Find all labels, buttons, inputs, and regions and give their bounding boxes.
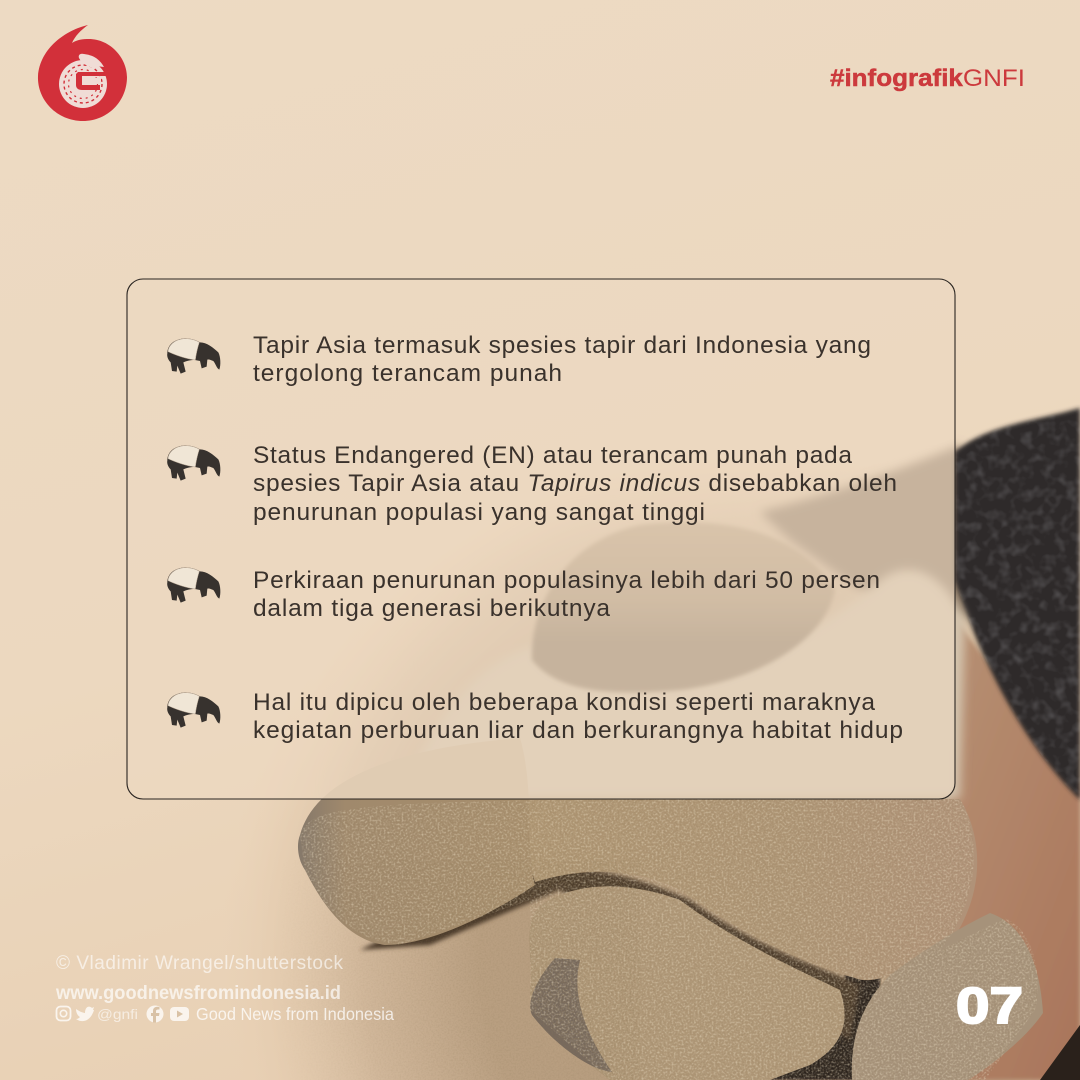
photo: sand grain [290,799,1080,1080]
icon: twitter [76,1007,94,1021]
website: www.goodnewsfromindonesia.id [55,982,341,1004]
photo: ground grain [388,862,640,1077]
icon: tapir 1 [167,338,220,374]
panel: facts [127,279,955,799]
text: fact 2: penurunan populasi yang sangat tinggi [253,499,705,526]
text: fact 1: Tapir Asia termasuk spesies tapir dari Indonesia yang [253,332,871,359]
text: fact 2 [253,442,897,526]
photo: black fur [955,408,1080,800]
photo: grey nail of middle toe [530,958,612,1072]
photo: skin of the leg [900,610,1080,1080]
icon: tapir 2 [167,445,220,481]
icon: youtube [170,1007,189,1021]
hashtag: #infografik GNFI [830,65,1025,92]
text: fact 2: spesies Tapir Asia atau Tapirus indicus disebabkan oleh [253,470,897,497]
photo: dark corner [1040,1025,1080,1080]
text: fact 4: Hal itu dipicu oleh beberapa kondisi seperti maraknya [253,689,875,716]
icon: instagram [56,1006,70,1020]
text: fact 1 [253,332,871,387]
page number: 07 [956,977,1023,1034]
text: fact 2: Status Endangered (EN) atau terancam punah pada [253,442,852,469]
text: page name: Good News from Indonesia [196,1004,394,1024]
social row [56,1004,394,1024]
photo: tapir foot [280,405,1080,1080]
text: handle: @gnfi [97,1007,138,1022]
icon: tapir 4 [167,692,220,728]
credit: © Vladimir Wrangel/shutterstock [56,953,344,974]
text: fact 3: Perkiraan penurunan populasinya lebih dari 50 persen [253,567,880,594]
text: fact 3 [253,567,880,622]
text: fact 4 [253,689,903,744]
photo: large upper nail [532,522,835,692]
photo: right toe [852,913,1043,1080]
photo: dark grey leg [760,445,975,620]
text: fact 1: tergolong terancam punah [253,360,562,387]
photo: shadow between toes [745,945,880,1080]
photo: upper foot through panel [400,570,965,799]
photo: main foot [522,799,977,980]
photo: left toe [298,800,535,945]
text: fact 3: dalam tiga generasi berikutnya [253,595,610,622]
photo: left toe through panel [324,798,325,799]
photo: middle toe [529,886,845,1080]
text: fact 4: kegiatan perburuan liar dan berkurangnya habitat hidup [253,717,903,744]
logo: GNFI [38,25,127,121]
icon: facebook [146,1006,164,1022]
icon: tapir 3 [167,567,220,603]
photo: sand above foot [340,470,950,799]
